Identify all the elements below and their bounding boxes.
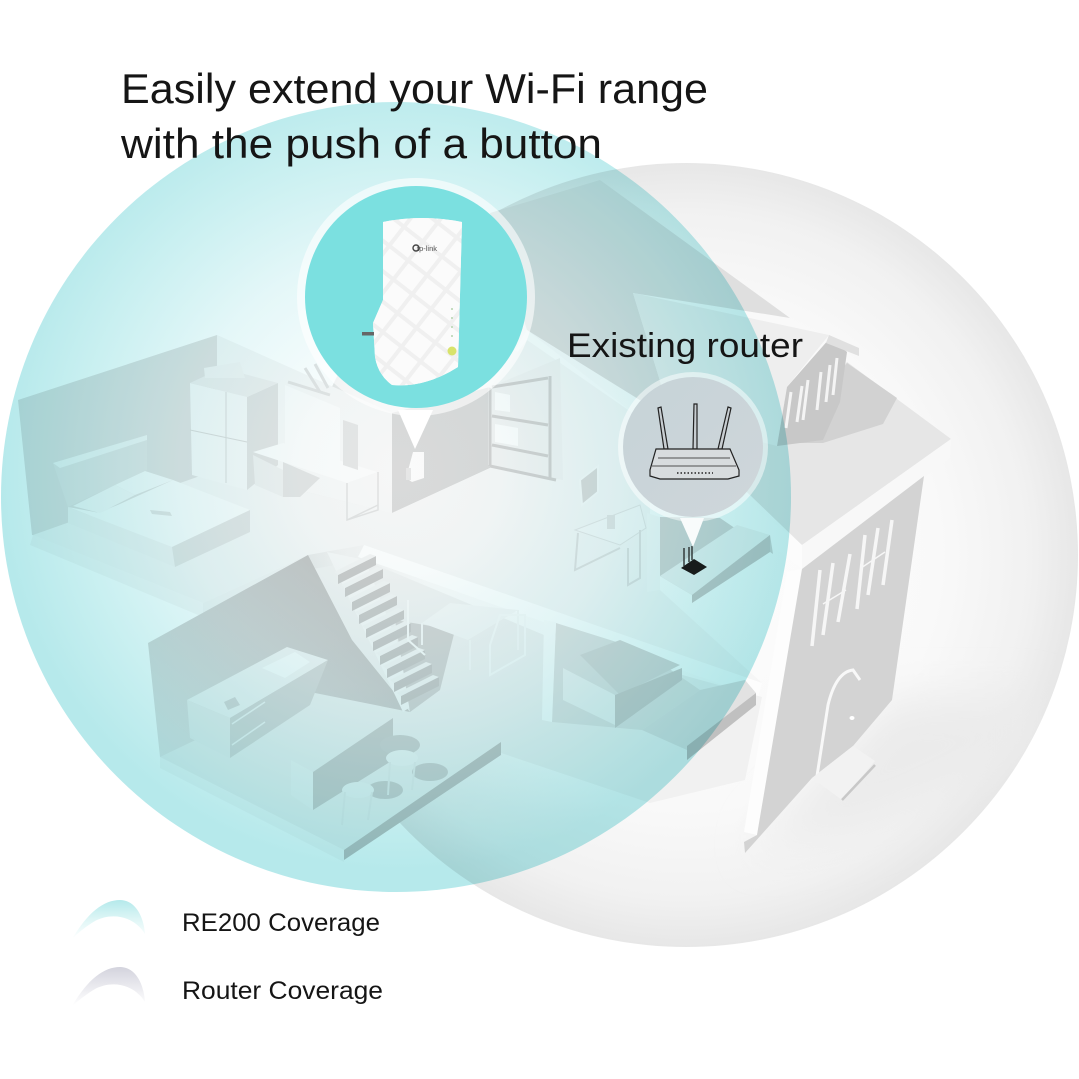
- legend item: RE200 coverage: RE200 Coverage: [182, 909, 380, 937]
- lower floor: [148, 555, 762, 862]
- legend item: RE200 coverage: [72, 900, 380, 939]
- wardrobe: [190, 362, 278, 490]
- label: existing router: Existing router: [567, 327, 803, 365]
- bar counter and stools: [291, 718, 448, 825]
- dining table and chairs: [408, 600, 525, 675]
- RE200 coverage circle: [1, 102, 791, 892]
- device: RE200 extender: [362, 218, 462, 386]
- desk: [253, 364, 378, 520]
- device: RE200 extender: tp-link: [417, 244, 437, 253]
- bookshelf: [488, 358, 563, 480]
- title: with the push of a button: [120, 120, 602, 167]
- legend item: router coverage: [72, 967, 383, 1006]
- stairs: [327, 552, 455, 712]
- router bubble: [623, 377, 763, 517]
- legend item: router coverage: Router Coverage: [182, 977, 383, 1005]
- extender bubble: [305, 186, 527, 408]
- router alcove: [647, 513, 773, 603]
- existing router callout: [618, 372, 768, 547]
- title: Easily extend your Wi-Fi range: [121, 65, 708, 112]
- router coverage circle: [294, 163, 1078, 947]
- extender callout: [297, 178, 535, 449]
- icon: router: [650, 404, 739, 479]
- house illustration: [18, 180, 1040, 862]
- small black router: [681, 546, 707, 575]
- title: [120, 65, 708, 167]
- upper floor: [18, 335, 762, 697]
- sofa: [563, 640, 682, 728]
- study chair and desk: [575, 466, 646, 585]
- roof: [490, 180, 951, 569]
- bed: [53, 435, 250, 567]
- dormer: [777, 335, 897, 446]
- kitchen counter and stove: [187, 647, 328, 758]
- extender on wall: [406, 452, 424, 482]
- legend: [72, 900, 383, 1006]
- front wall: [744, 476, 924, 853]
